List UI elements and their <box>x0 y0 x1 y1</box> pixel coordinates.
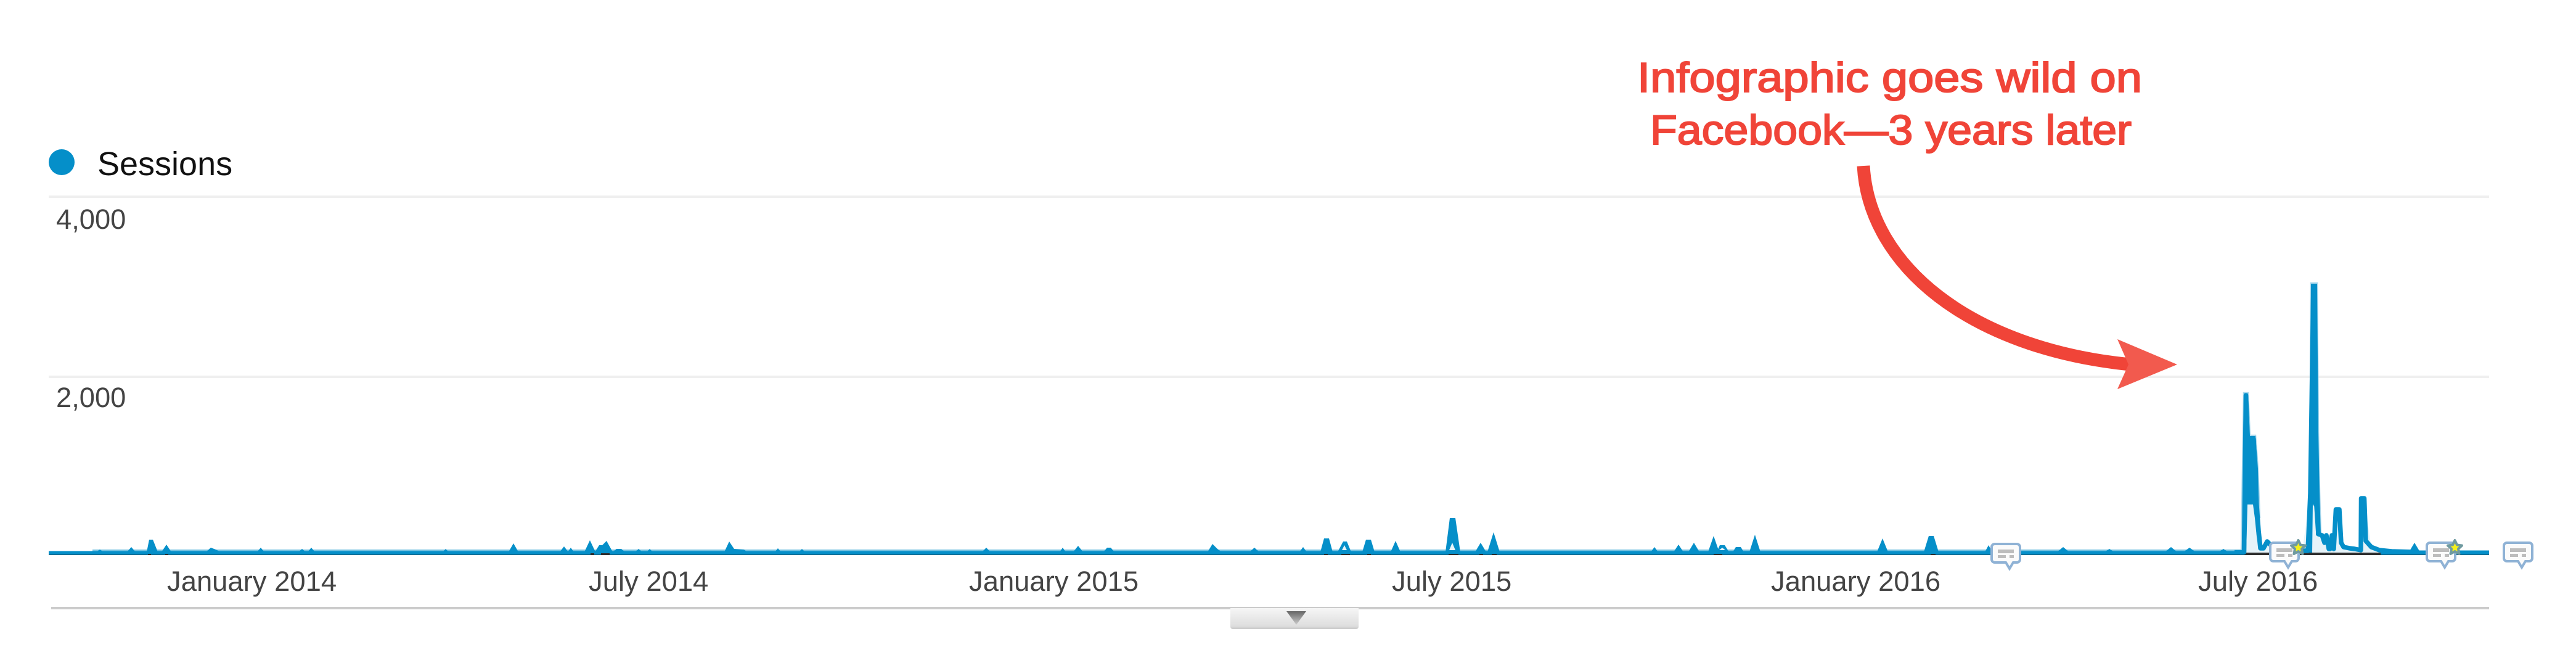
y axis labels: 2,000 <box>56 382 126 413</box>
low traffic band <box>49 550 2489 555</box>
callout text: Infographic goes wild on <box>1637 54 2142 101</box>
annotation icon 3 with star <box>2427 540 2462 567</box>
solid body of main viral spike <box>2308 284 2321 553</box>
solid body of first viral spike <box>2242 393 2263 553</box>
y axis labels <box>56 204 126 413</box>
annotation icon 1 <box>1992 544 2020 569</box>
annotation icon 2 with star <box>2270 540 2305 567</box>
x axis labels <box>167 566 2318 597</box>
callout text: Facebook—3 years later <box>1650 107 2132 154</box>
collapse button <box>1230 608 1359 629</box>
small traffic spikes <box>96 518 2420 552</box>
line chart: sessions over time <box>49 283 2489 555</box>
viral spike halo <box>2241 283 2321 553</box>
x axis labels: July 2014 <box>589 566 708 597</box>
x axis labels: July 2016 <box>2198 566 2318 597</box>
legend: sessions: Sessions <box>97 146 232 183</box>
gridlines <box>49 196 2489 378</box>
x axis labels: January 2015 <box>969 566 1139 597</box>
y axis labels: 4,000 <box>56 204 126 235</box>
x axis labels: January 2016 <box>1771 566 1940 597</box>
x axis labels: January 2014 <box>167 566 337 597</box>
viral traffic spikes <box>2235 286 2413 553</box>
x axis labels: July 2015 <box>1392 566 1511 597</box>
dark baseline showing beneath spikes <box>148 553 1936 555</box>
icon: down triangle <box>1286 611 1306 625</box>
area fill under viral spikes <box>2244 286 2379 553</box>
callout text <box>1637 54 2142 154</box>
bottom divider with collapse button <box>51 607 2489 629</box>
annotation icon 4 <box>2504 543 2532 567</box>
arrow: callout pointing to the spike <box>1863 166 2177 389</box>
zero baseline <box>49 553 2489 555</box>
notches under spikes <box>1342 543 1725 550</box>
